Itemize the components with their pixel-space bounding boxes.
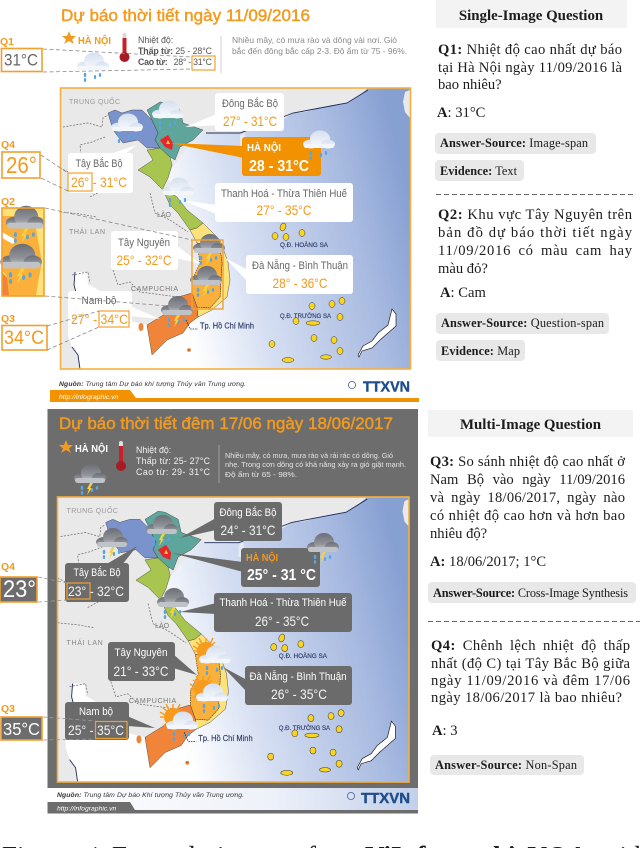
tag: answer source Q4	[430, 755, 584, 775]
callout: Ha Noi: HÀ NỘI	[247, 141, 281, 154]
callout: Tay Nguyen	[108, 642, 197, 681]
callout: Ha Noi: HÀ NỘI	[246, 551, 278, 564]
footer stripe with url tab	[48, 802, 418, 814]
weather description: nhẹ. Trong cơn dông có khả năng xảy ra gió giật mạnh.	[225, 460, 406, 469]
weather description: Độ ẩm từ 65 - 98%.	[225, 470, 297, 479]
heading: single-image question	[436, 0, 627, 28]
heading: multi-image question: Multi-Image Question	[460, 417, 602, 433]
footer stripe with url tab: http://infographic.vn	[57, 806, 117, 812]
tag: answer source Q2: Answer-Source: Question-span	[441, 316, 604, 330]
tag: answer source Q1: Answer-Source: Image-span	[440, 136, 588, 150]
question Q2: màu đỏ?	[438, 261, 488, 277]
answer Q1: A: 31°C	[437, 105, 485, 121]
question Q1: bao nhiêu?	[438, 77, 502, 93]
map frame	[60, 88, 410, 369]
logo: TTXVN: TTXVN	[361, 790, 410, 807]
answer Q3: A: 18/06/2017; 1°C	[430, 554, 546, 570]
weather description	[225, 451, 406, 479]
question Q2	[438, 207, 633, 277]
annotation: Q1	[0, 36, 215, 72]
question Q3	[430, 454, 625, 542]
callout: Da Nang - Binh Thuan: 28° - 36°C	[272, 275, 328, 291]
question Q2: Q2: Khu vực Tây Nguyên trên	[438, 207, 633, 223]
source line: Nguồn: Trung tâm Dự báo khí tượng Thủy văn Trung ương.	[59, 379, 246, 388]
callout: Thanh Hoa - Thua Thien Hue: Thanh Hoá - Thừa Thiên Huế	[221, 188, 347, 200]
annotation: Q4 second image: 23°	[3, 576, 36, 603]
annotation: Q1: 31°C	[4, 50, 38, 70]
question Q1: tại Hà Nội ngày 11/09/2016 là	[438, 60, 623, 76]
callout: Tay Nguyen: Tây Nguyên	[118, 237, 170, 249]
title: forecast 11/09/2016: Dự báo thời tiết ngày 11/09/2016	[61, 7, 310, 25]
question Q4: ngày 18/06/2017 là bao nhiêu?	[431, 690, 622, 706]
annotation: Q3: 34°C	[4, 327, 44, 349]
annotation: Q3: Q3	[1, 313, 15, 325]
footer stripe with url tab	[50, 390, 419, 402]
icon: rain cloud Hanoi	[77, 52, 109, 82]
question Q4	[431, 638, 631, 706]
tag: evidence Q2: Evidence: Map	[441, 344, 520, 358]
question Q3: nhiêu độ?	[430, 526, 487, 542]
weather description: Nhiều mây, có mưa, mưa rào và rải rác có dông. Gió	[225, 451, 393, 460]
callout: Tay Bac Bo: Tây Bắc Bộ	[76, 157, 122, 170]
question Q4: ngày 11/09/2016 và đêm 17/06	[431, 673, 630, 689]
callout: Ha Noi: 25° - 31 °C	[247, 567, 316, 584]
tag: evidence Q1	[435, 160, 524, 181]
callout: Thanh Hoa - Thua Thien Hue: Thanh Hoá - Thừa Thiên Huế	[220, 597, 346, 609]
temperature summary text	[138, 35, 213, 67]
panel: multi-image questions	[428, 410, 640, 775]
tag: answer source Q3	[428, 582, 636, 603]
question Q3: và ngày 18/06/2017, ngày nào	[430, 490, 625, 506]
callout: Nam Bo	[65, 702, 155, 740]
callout: Nam Bo: 25° - 35°C	[68, 722, 124, 738]
footer band	[48, 788, 418, 810]
callout: Dong Bac Bo: Đông Bắc Bộ	[222, 97, 278, 110]
Hanoi heading: HÀ NỘI	[78, 34, 111, 47]
callout: Da Nang - Binh Thuan: Đà Nẵng - Bình Thuận	[250, 670, 346, 683]
annotation: Q4: 26°	[6, 152, 37, 178]
map: Vietnam regions 2017	[58, 497, 409, 782]
temperature summary text: Cao từ: 28° - 31°C	[138, 57, 213, 67]
tag: answer source Q3: Answer-Source: Cross-Image Synthesis	[433, 586, 628, 600]
callout: Nam Bo: 27° - 34°C	[71, 311, 128, 327]
callout: Tay Bac Bo: 23° - 32°C	[68, 583, 124, 599]
icon: thermometer	[116, 441, 126, 471]
icon: star Hanoi	[59, 440, 73, 453]
annotation: Q2 inset map	[0, 196, 192, 308]
callout: Ha Noi	[172, 548, 320, 587]
weather description	[232, 35, 407, 56]
callout: Nam Bo: Nam bộ	[82, 295, 116, 307]
callout: Da Nang - Binh Thuan: Đà Nẵng - Bình Thuận	[252, 259, 348, 272]
callout: Dong Bac Bo: Đông Bắc Bộ	[220, 506, 276, 519]
callout: Tay Bac Bo: Tây Bắc Bộ	[74, 566, 120, 579]
question Q3: Nam Bộ vào ngày 11/09/2016	[430, 472, 625, 488]
callout: Tay Bac Bo	[65, 546, 137, 602]
tag: answer source Q1	[435, 133, 596, 154]
temperature summary text: Thấp từ: 25 - 28°C	[138, 46, 213, 56]
callout: Nam Bo	[68, 291, 160, 330]
callout: Tay Bac Bo: 26° - 31°C	[71, 174, 127, 190]
title: forecast 18/06/2017: Dự báo thời tiết đêm 17/06 ngày 18/06/2017	[59, 415, 393, 433]
question Q4: Q4: Chênh lệch nhiệt độ thấp	[431, 638, 630, 654]
weather icons on map	[96, 515, 339, 741]
tag: evidence Q1: Evidence: Text	[440, 164, 518, 178]
temperature summary text: Nhiệt độ:	[136, 445, 171, 455]
temperature summary text	[136, 445, 211, 477]
tag: answer source Q2	[436, 313, 609, 334]
heading: multi-image question	[428, 410, 633, 437]
icon: storm cloud Hanoi	[74, 464, 106, 495]
callout: Thanh Hoa - Thua Thien Hue: 27° - 35°C	[256, 202, 312, 218]
annotation: Q3 second image: Q3	[1, 703, 15, 715]
question Q1	[438, 42, 623, 93]
panel: single-image questions	[435, 0, 634, 361]
dark panel background	[48, 409, 418, 788]
temperature summary text: Cao từ: 29- 31°C	[136, 467, 211, 477]
callout: Dong Bac Bo	[180, 502, 282, 541]
heading: single-image question: Single-Image Question	[459, 8, 604, 24]
callout: Da Nang - Binh Thuan	[225, 255, 353, 294]
map: Vietnam regions 2016	[60, 88, 410, 369]
infographic panel: weather 11/09/2016	[50, 7, 419, 402]
temperature summary text: Nhiệt độ:	[138, 35, 173, 45]
question Q4: nhất (độ C) tại Tây Bắc Bộ giữa	[431, 656, 631, 672]
callout: Thanh Hoa - Thua Thien Hue	[180, 593, 352, 632]
question Q2: bản đồ dự báo thời tiết ngày	[438, 225, 633, 241]
footer stripe with url tab: http://infographic.vn	[59, 394, 119, 401]
callout: Da Nang - Binh Thuan: 26° - 35°C	[271, 686, 327, 702]
tag: answer source Q4: Answer-Source: Non-Span	[435, 758, 577, 772]
callout: Dong Bac Bo: 27° - 31°C	[223, 113, 277, 129]
callout: Tay Nguyen: 21° - 33°C	[114, 663, 168, 679]
tag: evidence Q2	[436, 340, 525, 361]
source line: Nguồn: Trung tâm Dự báo Khí tượng Thủy văn Trung ương.	[57, 790, 244, 799]
callout: Dong Bac Bo: 24° - 31°C	[220, 522, 276, 538]
callout: Tay Bac Bo	[68, 145, 137, 193]
answer Q2: A: Cam	[440, 285, 486, 301]
Hanoi heading: HÀ NỘI	[75, 442, 108, 455]
weather description: bắc đến đông bắc cấp 2-3. Độ ẩm từ 75 - 96%.	[232, 46, 407, 56]
icon: star Hanoi	[62, 31, 76, 44]
callout: Tay Nguyen: Tây Nguyên	[114, 647, 168, 659]
callout: Nam Bo: Nam bộ	[79, 706, 113, 718]
callout: Tay Nguyen: 25° - 32°C	[116, 252, 172, 268]
infographic panel: weather 18/06/2017	[48, 409, 418, 814]
icon: thermometer	[120, 33, 130, 62]
map frame	[58, 497, 409, 782]
callout: Thanh Hoa - Thua Thien Hue	[182, 183, 353, 222]
callout: Thanh Hoa - Thua Thien Hue: 26° - 35°C	[255, 613, 309, 629]
callout: Ha Noi	[170, 137, 321, 176]
annotation: Q4 second image	[0, 561, 67, 603]
annotation: Q3	[1, 311, 99, 350]
annotation: Q4 second image: Q4	[1, 561, 15, 573]
question Q2: 11/09/2016 có màu cam hay	[438, 243, 633, 259]
annotation: Q4	[1, 139, 68, 191]
annotation: Q1: Q1	[0, 36, 14, 48]
question Q3: Q3: So sánh nhiệt độ cao nhất ở	[430, 454, 625, 470]
annotation: Q3 second image: 35°C	[3, 719, 40, 739]
logo: TTXVN: TTXVN	[363, 378, 410, 396]
callout: Da Nang - Binh Thuan	[223, 666, 352, 705]
weather icons on map	[111, 100, 335, 327]
highlight box: Tay Nguyen region	[192, 240, 223, 309]
callout: Tay Nguyen	[111, 231, 201, 270]
callout: Ha Noi: 28 - 31°C	[249, 158, 309, 175]
annotation: Q2 inset map: Q2	[1, 196, 15, 208]
callout: Dong Bac Bo	[185, 93, 284, 131]
answer Q4: A: 3	[432, 723, 458, 739]
question Q3: có nhiệt độ cao hơn và hơn bao	[430, 508, 625, 524]
temperature summary text: Thấp từ: 25- 27°C	[136, 456, 211, 466]
annotation: Q3 second image	[1, 703, 96, 740]
annotation: Q4: Q4	[1, 139, 15, 151]
question Q1: Q1: Nhiệt độ cao nhất dự báo	[438, 42, 622, 58]
weather description: Nhiều mây, có mưa rào và dông vài nơi. Gió	[232, 35, 397, 45]
